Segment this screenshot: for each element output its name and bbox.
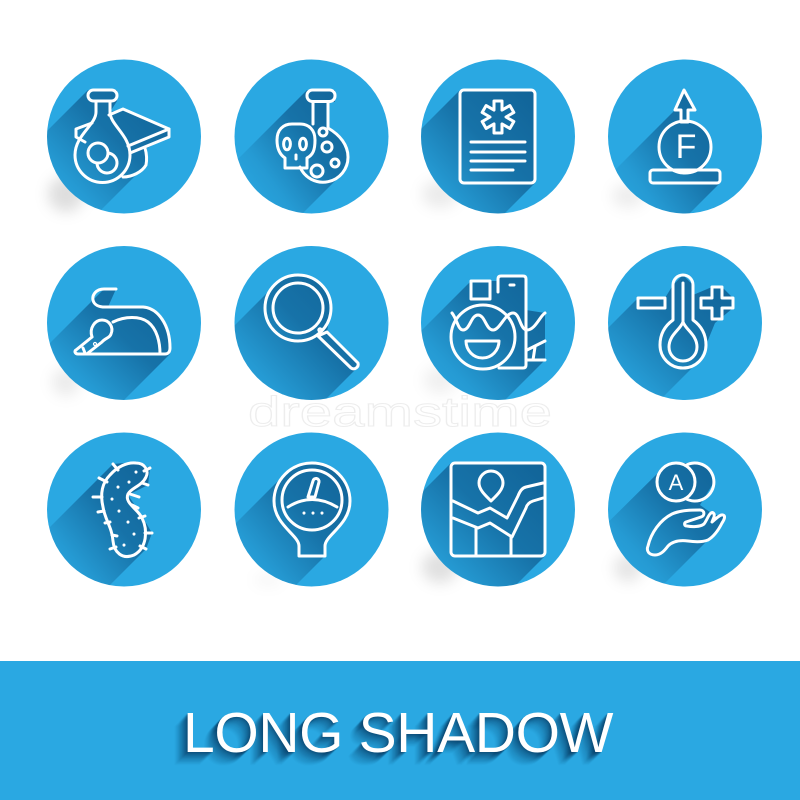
banner title: LONG SHADOW [183, 701, 613, 765]
icon button: medical report [421, 60, 575, 214]
icon button: map with location pin [421, 432, 575, 586]
icon button: pressure gauge [234, 432, 388, 586]
icon button: fluorine element with arrow: F [676, 128, 696, 166]
icon button: hand holding vitamin A: A [669, 470, 684, 495]
bottom banner [0, 661, 800, 800]
soft cast shadows on background [48, 176, 644, 586]
icon button: fluorine element with arrow [585, 60, 762, 273]
watermark: dreamstime [248, 388, 552, 435]
icon button: hand holding vitamin A [608, 432, 762, 586]
icon button: skull and poison flask [234, 60, 388, 214]
icon button: smiling face with refrigerator [421, 246, 575, 400]
icon button: flask and graduation cap [47, 60, 201, 214]
icon button: bacteria [9, 432, 201, 639]
icon button: magnifying glass [234, 246, 388, 400]
icon button: laboratory mouse [3, 246, 201, 444]
icon button: thermometer with minus and plus [548, 246, 762, 451]
